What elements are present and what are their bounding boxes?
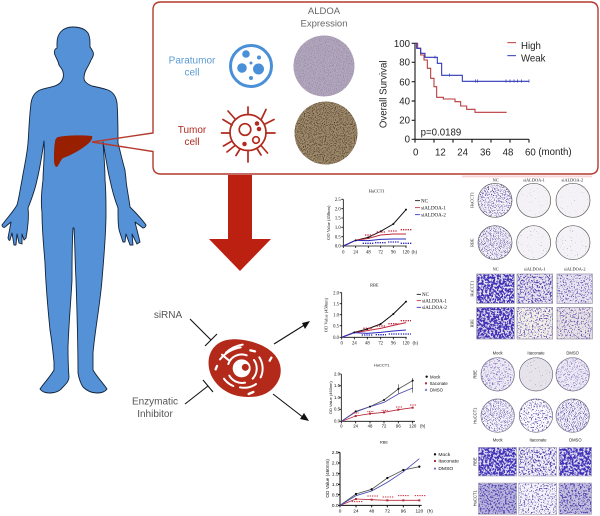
chart: HuCCT1 Itaconate: 48 — [368, 424, 373, 429]
chart: HuCCT1 siALDOA: 2.0 — [335, 207, 341, 212]
chart: RBE Itaconate: DMSO — [438, 466, 453, 472]
chart: HuCCT1 siALDOA — [326, 188, 446, 255]
IHC micrograph: tumor — [294, 102, 358, 164]
p value: p=0.0189 — [421, 128, 461, 139]
chart: RBE siALDOA: NC — [422, 293, 430, 298]
legend: Weak — [521, 54, 546, 65]
colony assays: siALDOA: NC — [493, 177, 499, 182]
axes — [412, 43, 529, 143]
transwell assays: Itaconate: DMSO — [569, 437, 582, 442]
colony assays: siALDOA: RBE — [470, 238, 475, 247]
chart: RBE Itaconate: (h) — [427, 508, 433, 513]
chart: HuCCT1 Itaconate: OD Value (460nm) — [328, 381, 333, 414]
colony assays: Itaconate: Itaconate — [527, 351, 545, 356]
chart: HuCCT1 Itaconate: 0.0 — [334, 419, 341, 424]
chart: HuCCT1 Itaconate: 96 — [396, 424, 401, 429]
ALDOA expression panel — [92, 2, 598, 174]
y tick labels: 60 — [399, 77, 410, 88]
survival chart — [378, 39, 572, 158]
label: Paratumor cell: cell — [184, 68, 200, 78]
transwell assays: Itaconate: Itaconate — [529, 437, 547, 442]
chart: RBE siALDOA: (h) — [413, 341, 418, 346]
curve: Weak — [415, 43, 529, 81]
chart: RBE siALDOA: 0 — [341, 341, 344, 346]
y tick labels: 100 — [394, 39, 410, 50]
transwell assays: Itaconate: HuCCT1 — [472, 490, 477, 506]
chart: RBE Itaconate: 24 — [353, 508, 359, 513]
colony assays: siALDOA: HuCCT1 — [470, 192, 475, 208]
chart: RBE siALDOA: 1.0 — [333, 313, 340, 318]
chart: RBE siALDOA: 96 — [391, 341, 396, 346]
label: Tumor cell: cell — [184, 137, 200, 148]
chart: HuCCT1 siALDOA: 24 — [353, 250, 359, 255]
label: siRNA: siRNA — [154, 310, 182, 321]
liver — [54, 135, 92, 167]
colony assays: Itaconate: Mock — [493, 351, 504, 356]
chart: HuCCT1 siALDOA: NC — [421, 199, 429, 204]
chart: HuCCT1 Itaconate: Mock — [430, 374, 441, 379]
chart: HuCCT1 Itaconate: 120 — [409, 424, 417, 429]
chart: RBE siALDOA: 48 — [365, 341, 370, 346]
transwell assays: Itaconate — [472, 437, 592, 514]
x tick labels: 36 — [480, 147, 491, 158]
chart: HuCCT1 Itaconate: 1.5 — [334, 383, 341, 388]
transwell assays: Itaconate: Mock — [493, 437, 504, 442]
colony assays: siALDOA — [470, 177, 590, 260]
transwell assays: siALDOA: siALDOA-2 — [564, 267, 585, 272]
x tick labels: 0 — [413, 147, 418, 158]
x tick labels: 12 — [435, 147, 446, 158]
chart: RBE Itaconate: 2.0 — [332, 461, 339, 467]
chart: RBE Itaconate: Itaconate — [438, 459, 459, 465]
y tick labels: 0 — [405, 135, 410, 146]
chart: HuCCT1 Itaconate: (h) — [420, 424, 426, 429]
chart: RBE Itaconate: 0.5 — [332, 492, 339, 498]
y tick labels: 20 — [399, 116, 410, 127]
transwell assays: siALDOA: siALDOA-1 — [524, 267, 545, 272]
chart: HuCCT1 Itaconate — [328, 363, 448, 429]
chart: HuCCT1 Itaconate: HuCCT1 — [374, 363, 390, 368]
chart: HuCCT1 siALDOA: 1.5 — [335, 217, 341, 222]
chart: RBE Itaconate: 96 — [401, 508, 406, 513]
chart: RBE Itaconate: OD Value (460nm) — [325, 459, 330, 498]
censor ticks — [435, 56, 529, 83]
chart: HuCCT1 Itaconate: 2.0 — [334, 371, 341, 376]
chart: RBE Itaconate: RBE — [380, 440, 388, 445]
colony assays: Itaconate: DMSO — [566, 351, 580, 356]
y axis title: Overall Survival — [378, 61, 389, 128]
chart: RBE Itaconate: 0.0 — [332, 503, 339, 509]
colony assays: Itaconate — [472, 351, 589, 432]
chart: RBE siALDOA: RBE — [370, 283, 379, 288]
chart: HuCCT1 Itaconate: 24 — [353, 424, 359, 429]
chart: RBE siALDOA: 0.5 — [333, 324, 340, 329]
chart: RBE Itaconate: 0 — [339, 508, 342, 513]
chart: HuCCT1 siALDOA: 1.0 — [335, 226, 341, 231]
label: Enzymatic Inhibitor: Inhibitor — [137, 409, 173, 420]
x tick labels: 48 — [503, 147, 513, 158]
heading: ALDOA Expression: ALDOA — [308, 6, 340, 17]
chart: RBE Itaconate: 72 — [385, 508, 390, 513]
chart: RBE siALDOA: siALDOA-2 — [422, 306, 447, 311]
IHC micrograph: paratumor — [294, 36, 354, 96]
chart: HuCCT1 siALDOA: siALDOA-2 — [421, 213, 446, 218]
colony assays: Itaconate: RBE — [472, 370, 477, 379]
chart: RBE siALDOA — [323, 283, 447, 346]
y tick labels: 80 — [399, 58, 410, 69]
chart: HuCCT1 Itaconate: Itaconate — [430, 381, 448, 386]
chart: RBE siALDOA: 24 — [352, 341, 357, 346]
chart: HuCCT1 siALDOA: 96 — [391, 250, 396, 255]
colony assays: siALDOA: siALDOA-2 — [562, 177, 583, 182]
chart: HuCCT1 Itaconate: DMSO — [430, 387, 444, 392]
chart: RBE siALDOA: 1.5 — [333, 302, 340, 307]
label: Enzymatic Inhibitor: Enzymatic — [132, 396, 178, 408]
chart: RBE siALDOA: 0.0 — [333, 336, 340, 341]
inhibition marker: inhibitor — [185, 380, 213, 404]
chart: HuCCT1 Itaconate: 72 — [382, 424, 387, 429]
chart: HuCCT1 Itaconate: 0 — [340, 424, 343, 429]
chart: HuCCT1 siALDOA: 0.5 — [335, 235, 341, 240]
chart: HuCCT1 siALDOA: (h) — [412, 250, 417, 255]
arrow: to lower results — [273, 394, 309, 421]
chart: RBE Itaconate: 2.5 — [332, 450, 339, 456]
chart: HuCCT1 siALDOA: 48 — [366, 250, 371, 255]
icon: paratumor cell — [230, 46, 272, 86]
legend — [507, 41, 546, 65]
chart: HuCCT1 siALDOA: siALDOA-1 — [421, 206, 446, 211]
chart: RBE siALDOA: 2.0 — [333, 291, 340, 296]
y tick labels: 40 — [399, 97, 410, 108]
chart: RBE Itaconate — [325, 440, 459, 513]
inhibition marker: siRNA — [190, 319, 217, 346]
label: Paratumor cell: Paratumor — [169, 56, 215, 66]
chart: RBE Itaconate: 1.0 — [332, 482, 339, 488]
transwell assays: siALDOA: HuCCT1 — [470, 281, 475, 297]
big red arrow — [209, 175, 271, 271]
colony assays: Itaconate: HuCCT1 — [472, 407, 477, 424]
chart: HuCCT1 Itaconate: 0.5 — [334, 407, 341, 412]
legend: High — [521, 41, 541, 52]
chart: HuCCT1 siALDOA: 0.0 — [335, 245, 341, 250]
x tick labels: 24 — [457, 147, 469, 158]
transwell assays: siALDOA: RBE — [470, 319, 475, 328]
chart: HuCCT1 siALDOA: 0 — [342, 250, 345, 255]
heading: ALDOA Expression: Expression — [300, 18, 348, 30]
curve: High — [415, 43, 507, 112]
chart: RBE siALDOA: siALDOA-1 — [422, 299, 447, 304]
chart: HuCCT1 siALDOA: HuCCT1 — [369, 188, 385, 193]
chart: HuCCT1 siALDOA: 2.5 — [335, 198, 341, 203]
icon: tumor cell — [222, 107, 275, 162]
chart: RBE siALDOA: OD Value (450nm) — [323, 297, 328, 332]
label: Tumor cell: Tumor — [178, 125, 206, 136]
human body silhouette — [2, 27, 146, 393]
transwell assays: siALDOA: NC — [493, 267, 499, 272]
colony assays: siALDOA: siALDOA-1 — [523, 177, 545, 182]
transwell assays: siALDOA — [470, 267, 592, 339]
chart: RBE siALDOA: 72 — [378, 341, 384, 346]
chart: HuCCT1 Itaconate: 1.0 — [334, 395, 341, 400]
chart: RBE Itaconate: 1.5 — [332, 471, 339, 477]
chart: HuCCT1 siALDOA: 72 — [378, 250, 384, 255]
chart: RBE Itaconate: 120 — [415, 508, 424, 513]
chart: RBE Itaconate: 48 — [369, 508, 375, 513]
chart: RBE siALDOA: 120 — [403, 341, 410, 346]
arrow: to upper results — [274, 321, 310, 344]
transwell assays: Itaconate: RBE — [472, 457, 477, 466]
chart: HuCCT1 siALDOA: OD Value (450nm) — [326, 205, 331, 240]
chart: RBE Itaconate: Mock — [438, 452, 451, 458]
chart: HuCCT1 siALDOA: 120 — [403, 250, 410, 255]
cancer cell icon — [209, 339, 281, 397]
x tick labels: 60 — [525, 147, 536, 158]
x axis unit: (month) — [538, 147, 572, 158]
